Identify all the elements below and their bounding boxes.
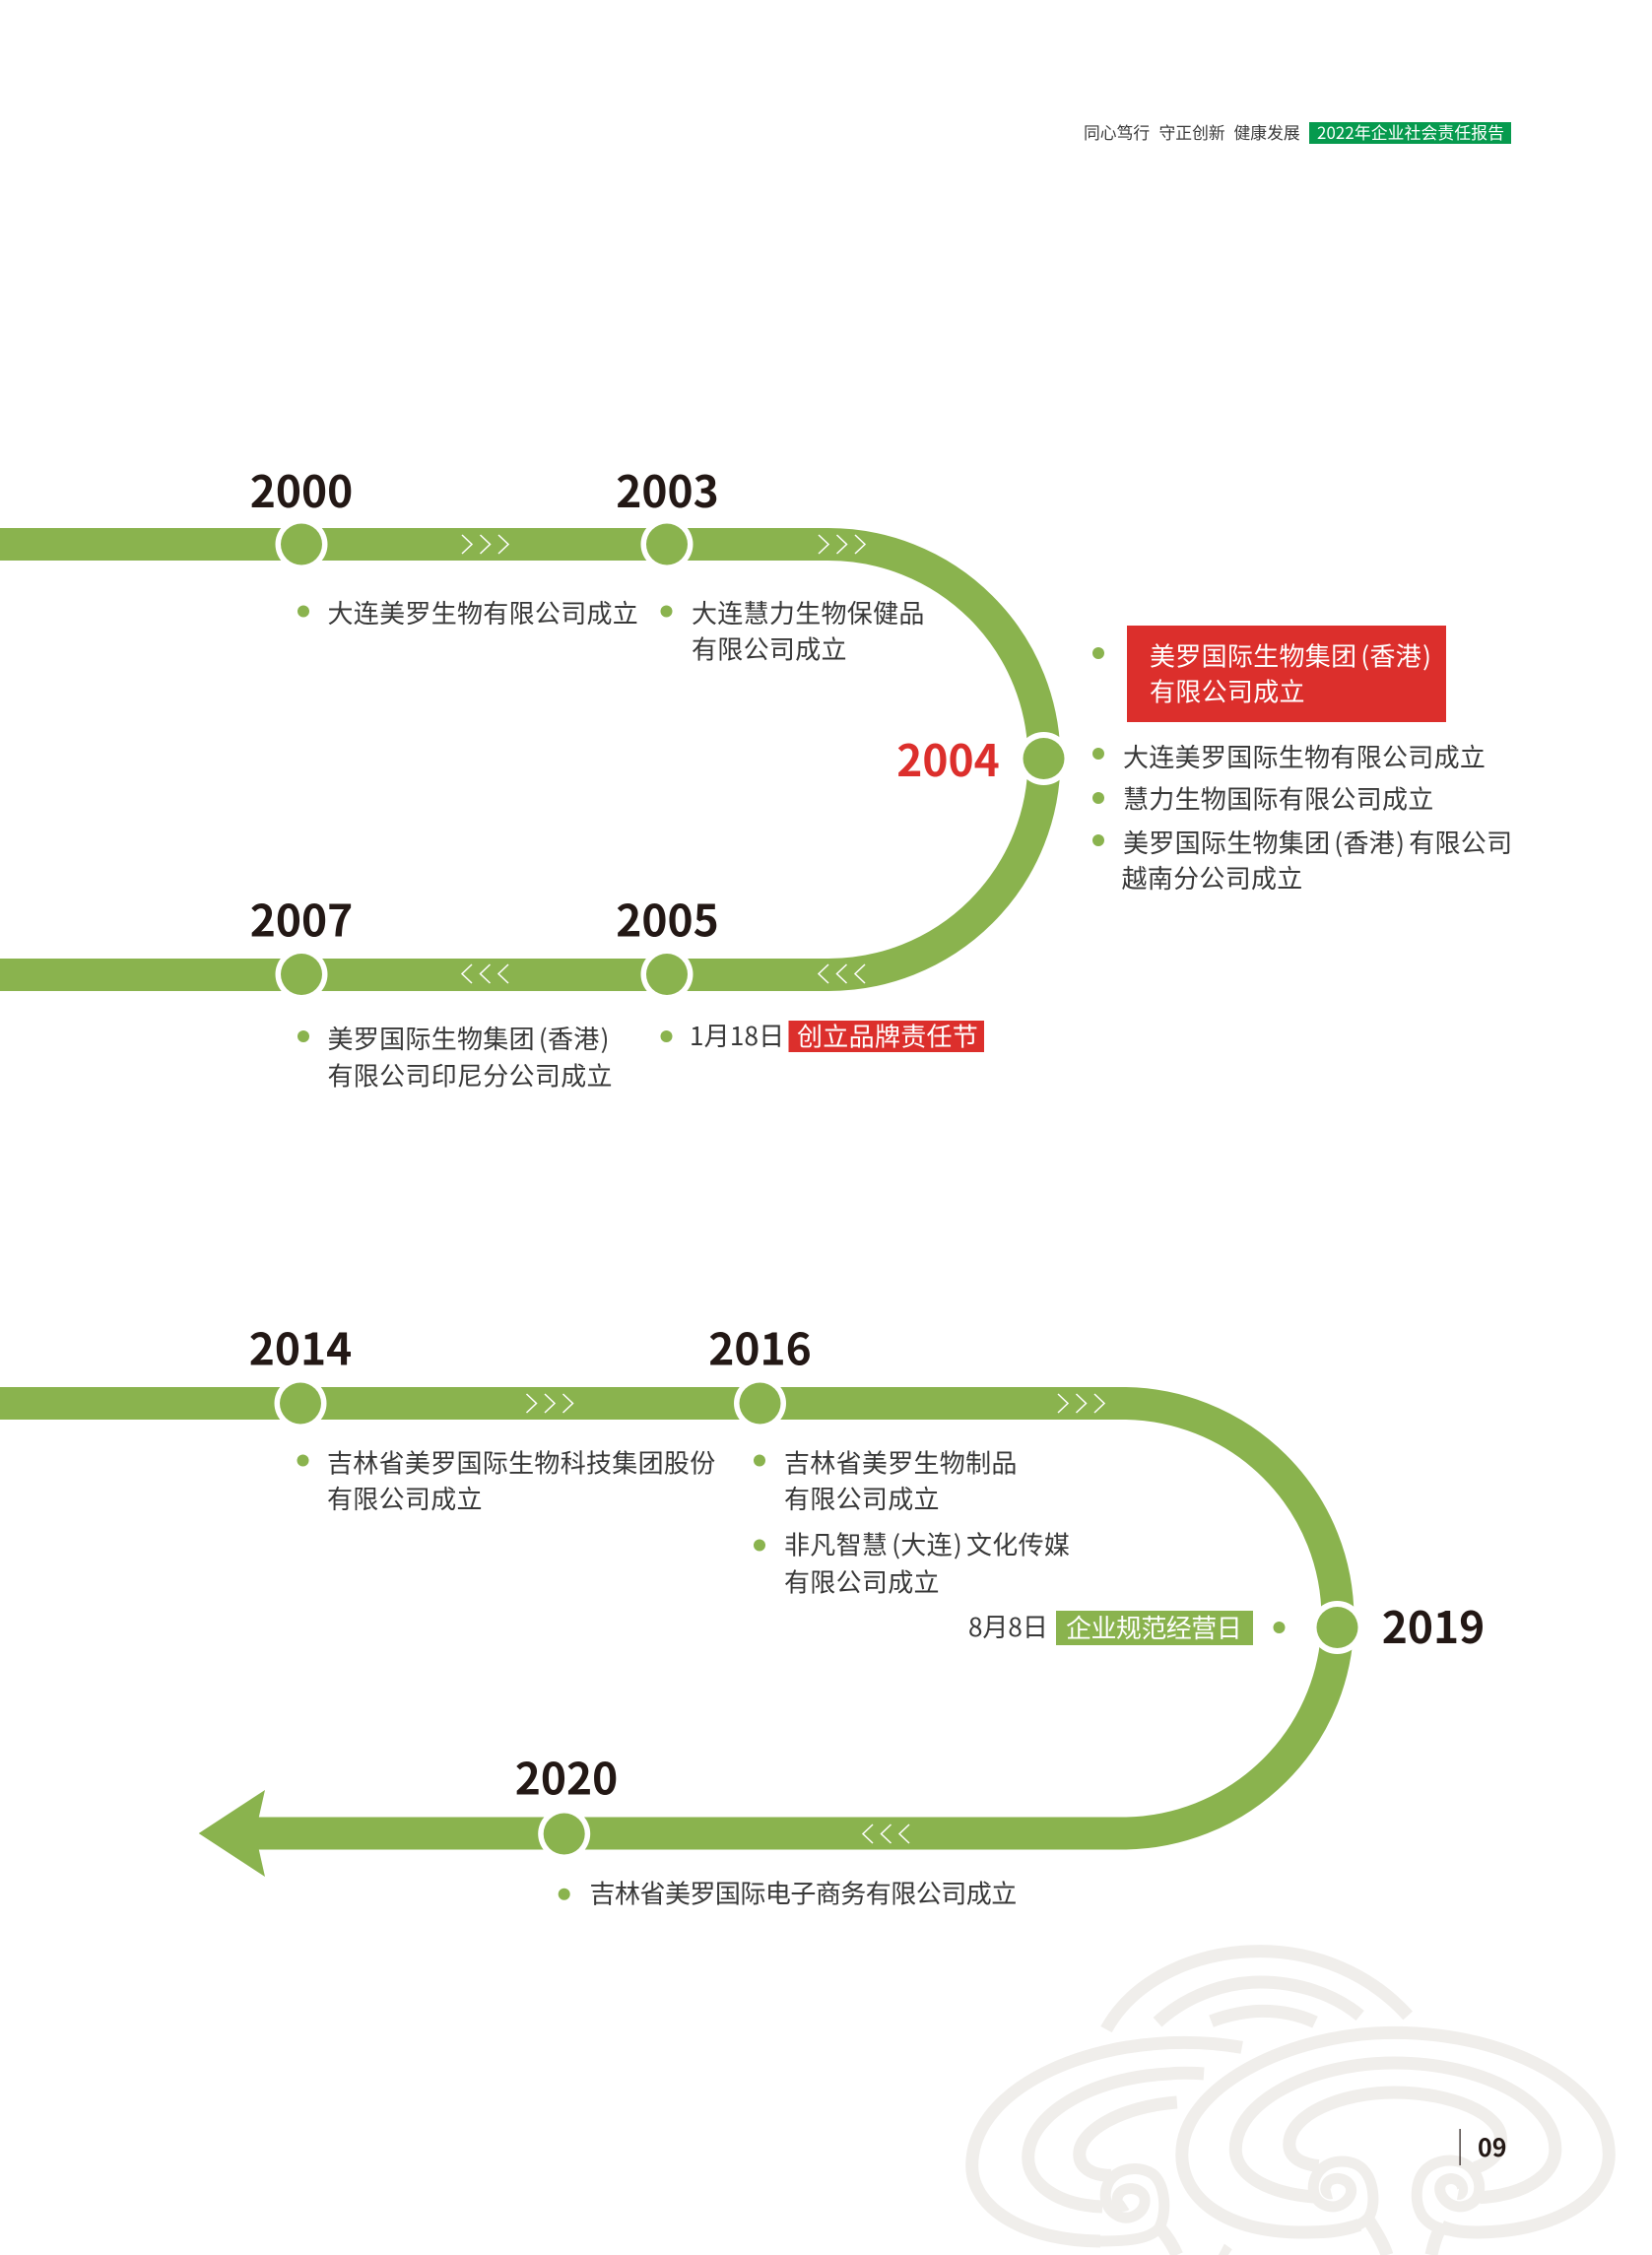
header slogan: 健康发展 bbox=[1233, 120, 1300, 144]
milestone 2014 bbox=[249, 1314, 716, 1516]
timeline band with U-turn bbox=[0, 1403, 1338, 1833]
milestone 2000 bbox=[250, 457, 638, 630]
milestone 2020: 2020 bbox=[515, 1744, 618, 1807]
milestone 2003: 大连慧力生物保健品 bbox=[692, 594, 925, 630]
2004 highlighted red callout: 美罗国际生物集团(香港) bbox=[1150, 636, 1431, 674]
header report badge: 2022年企业社会责任报告 bbox=[1317, 120, 1504, 144]
2004 list items bbox=[1092, 738, 1512, 895]
header slogan: 同心笃行 bbox=[1084, 120, 1150, 144]
milestone 2000: 大连美罗生物有限公司成立 bbox=[327, 594, 638, 630]
2004 list items: 大连美罗国际生物有限公司成立 bbox=[1123, 738, 1486, 774]
milestone 2014: 吉林省美罗国际生物科技集团股份 bbox=[327, 1444, 716, 1480]
timeline panel: 2014 to 2020 bbox=[0, 1314, 1485, 1911]
milestone 2004 bbox=[896, 626, 1512, 895]
milestone 2003: 2003 bbox=[616, 457, 719, 520]
direction chevrons bbox=[462, 535, 865, 983]
milestone 2020: 吉林省美罗国际电子商务有限公司成立 bbox=[589, 1874, 1017, 1911]
milestone 2003 bbox=[616, 457, 925, 666]
2005 red tag: 创立品牌责任节 bbox=[797, 1017, 978, 1054]
background watermark: lingzhi mushroom bbox=[972, 1952, 1609, 2255]
header slogan bbox=[1084, 120, 1300, 144]
2004 highlighted red callout: 有限公司成立 bbox=[1150, 672, 1305, 709]
milestone 2016: 非凡智慧(大连)文化传媒 bbox=[784, 1525, 1070, 1562]
milestone 2007: 2007 bbox=[250, 887, 353, 950]
milestone 2005 bbox=[616, 887, 984, 1054]
milestone 2007: 美罗国际生物集团(香港) bbox=[327, 1020, 610, 1056]
milestone 2004: 2004 bbox=[896, 726, 1000, 789]
2004 list items: 慧力生物国际有限公司成立 bbox=[1123, 780, 1434, 816]
milestone 2007: 有限公司印尼分公司成立 bbox=[327, 1056, 613, 1094]
timeline band with U-turn bbox=[0, 544, 1044, 975]
2019 green tag: 企业规范经营日 bbox=[1066, 1609, 1242, 1645]
milestone 2016: 2016 bbox=[708, 1314, 812, 1377]
timeline panel: 2000 to 2007 bbox=[0, 457, 1512, 1094]
milestone 2005: 1月18日 bbox=[690, 1017, 784, 1053]
2004 list items: 美罗国际生物集团(香港)有限公司 bbox=[1123, 824, 1512, 860]
milestone 2016: 有限公司成立 bbox=[784, 1562, 940, 1600]
header strip bbox=[1084, 120, 1511, 144]
2004 list items: 越南分公司成立 bbox=[1121, 859, 1303, 895]
header slogan: 守正创新 bbox=[1158, 120, 1225, 144]
milestone 2000: 2000 bbox=[250, 457, 353, 520]
2004 highlighted red callout bbox=[1092, 626, 1446, 722]
page number: 09 bbox=[1478, 2129, 1507, 2164]
milestone 2019: 2019 bbox=[1382, 1593, 1485, 1656]
milestone 2005: 2005 bbox=[616, 887, 719, 950]
arrow head bbox=[199, 1790, 265, 1877]
milestone 2019 bbox=[968, 1593, 1485, 1656]
milestone 2003: 有限公司成立 bbox=[692, 630, 847, 666]
milestone 2007 bbox=[250, 887, 613, 1094]
direction chevrons bbox=[526, 1394, 1104, 1843]
milestone 2016 bbox=[708, 1314, 1070, 1600]
milestone 2016: 吉林省美罗生物制品 bbox=[784, 1444, 1018, 1480]
milestone 2014: 2014 bbox=[249, 1314, 352, 1377]
milestone 2020 bbox=[515, 1744, 1017, 1911]
milestone 2014: 有限公司成立 bbox=[327, 1480, 483, 1516]
milestone 2019: 8月8日 bbox=[968, 1608, 1048, 1644]
page number bbox=[1460, 2129, 1507, 2165]
milestone 2016: 有限公司成立 bbox=[784, 1480, 940, 1516]
